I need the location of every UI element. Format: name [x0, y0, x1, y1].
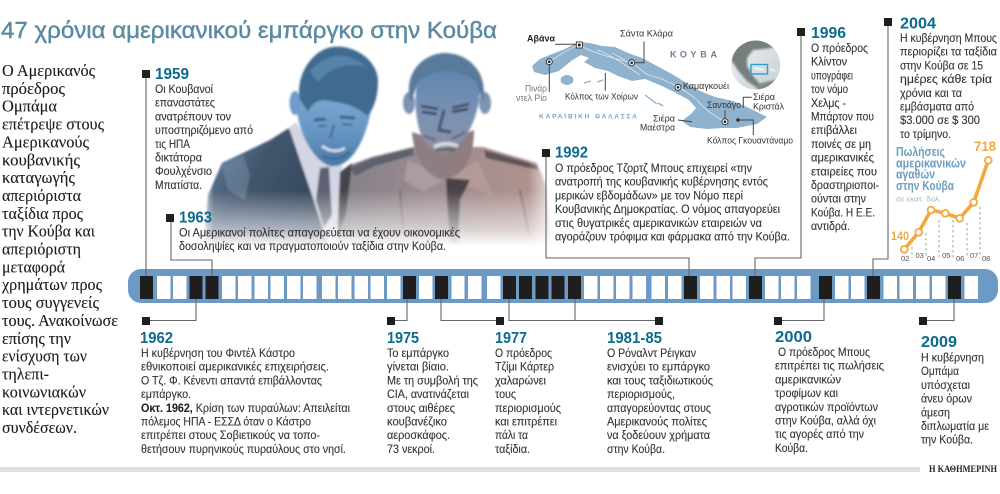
map labels: Κόλπος των Χοίρων: [565, 91, 638, 102]
event: 2004: $3.000 σε $ 300: [900, 113, 980, 127]
globe locator: [731, 40, 780, 90]
timeline bar: [128, 269, 998, 303]
event: 2000: στην Κούβα, αλλά όχι: [775, 414, 876, 428]
event: 1959: Οι Κουβανοί: [155, 82, 213, 96]
intro text: μεταφορά: [2, 257, 65, 276]
photo: Kennedy and Castro: [190, 47, 560, 256]
event: 2009: άνευ όρων: [921, 392, 972, 406]
sales line: [904, 160, 988, 249]
roads: [549, 45, 725, 122]
event: 2004: 2004: [900, 16, 936, 32]
intro text: κοινωνιακών: [2, 382, 87, 401]
Castro hair: [409, 53, 484, 102]
event: 1959: ανατρέπουν τον: [155, 109, 231, 123]
event: 2000: Ο πρόεδρος Μπους: [778, 345, 870, 359]
map labels: Σιέρα: [653, 114, 675, 125]
event: 1977: περιορισμούς: [495, 401, 561, 415]
map labels: Σιέρα: [753, 92, 775, 103]
event: 2009: υπόσχεται: [921, 378, 970, 392]
event: 1977: Ο πρόεδρος: [495, 346, 552, 360]
event: 1975: [387, 317, 478, 456]
event: 1975: 73 νεκροί.: [387, 442, 435, 456]
chart heading: στην Κούβα: [896, 178, 954, 193]
event: 1962: εμπάργκο.: [141, 387, 191, 401]
chart heading: Πωλήσεις: [896, 144, 945, 159]
event: 2000: τις αγορές από την: [775, 427, 864, 441]
event: 1981-85: στην Κούβα.: [607, 442, 665, 456]
chart heading: [896, 144, 966, 204]
event: 1981-85: και τους ταξιδιωτικούς: [607, 373, 713, 387]
event: 2004: ημέρες κάθε τρία: [900, 72, 992, 86]
event: 1992: Ο πρόεδρος Τζορτζ Μπους επιχειρεί «την: [555, 161, 752, 175]
map labels: ΚΟΥΒΑ: [670, 49, 718, 59]
event: 1975: Με τη συμβολή της: [387, 373, 478, 387]
intro text: Ο Αμερικανός: [2, 61, 95, 80]
event: 2009: άμεση: [921, 405, 950, 419]
map labels: Κριστάλ: [753, 102, 784, 112]
data points: [901, 157, 992, 253]
event: 2004: [884, 16, 997, 141]
event: 1963: δοσοληψίες και να πραγματοποιούν ταξίδια στην Κούβα.: [179, 239, 446, 253]
empty year cells: [157, 276, 978, 299]
event: 1959: επαναστάτες: [155, 96, 215, 110]
map labels: Καμαγκουέι: [683, 81, 729, 92]
map labels: ντελ Ρίο: [516, 93, 547, 104]
Castro face: [416, 68, 480, 153]
event: 1963: [166, 210, 460, 253]
event: 2000: Κούβα.: [775, 441, 808, 455]
event: 1996: αμερικανικές: [811, 151, 874, 165]
island: [532, 42, 767, 129]
event: 1996: ποινές σε μη: [811, 137, 871, 151]
event: 1996: Μπάρτον που: [811, 110, 874, 124]
event: 1977: και επιτρέπει: [495, 414, 557, 428]
intro text: επέτρεψε στους: [2, 115, 104, 134]
event: 1981-85: 1981-85: [607, 330, 662, 347]
event: 2009: Η κυβέρνηση: [921, 350, 984, 364]
event: 1996: Ο πρόεδρος: [811, 41, 868, 55]
event: 1981-85: να ξοδεύουν χρήματα: [607, 428, 710, 442]
event: 1977: χαλαρώνει: [495, 373, 546, 387]
event: 2000: επιτρέπει τις πωλήσεις: [775, 359, 884, 373]
title: 47 χρόνια αμερικανικού εμπάργκο στην Κούβα: [1, 17, 497, 43]
event: 2000: 2000: [775, 329, 812, 346]
Castro beard: [412, 130, 474, 179]
intro text: κουβανικής: [2, 150, 80, 169]
map labels: Αβάνα: [527, 34, 555, 44]
event: 1962: 1962: [140, 330, 173, 347]
event: 1996: 1996: [811, 25, 846, 42]
event: 2004: το τρίμηνο.: [900, 127, 951, 141]
event: 2000: [774, 317, 884, 455]
event: 1981-85: Αμερικανούς πολίτες: [607, 414, 707, 428]
value labels: 718: [974, 138, 996, 154]
event: 1975: γίνεται βίαιο.: [387, 360, 449, 374]
intro text: απεριόριστη: [2, 240, 81, 258]
Castro features: [421, 104, 469, 151]
intro text: και ιντερνετικών: [2, 400, 110, 419]
Kennedy jacket: [203, 128, 330, 250]
map labels: Κόλπος Γκουαντάναμο: [707, 135, 793, 146]
event: 1962: Η κυβέρνηση του Φιντέλ Κάστρο: [141, 346, 295, 360]
map labels: ΚΑΡΑΪΒΙΚΗ ΘΑΛΑΣΣΑ: [539, 112, 637, 120]
intro text: ταξίδια προς: [2, 204, 83, 223]
intro text: πρόεδρος: [2, 79, 65, 98]
event: 1996: υπογράφει: [811, 68, 853, 82]
year labels: 06: [956, 254, 964, 263]
value labels: [891, 138, 996, 243]
map labels: [516, 29, 793, 146]
event: 1962: πόλεμος ΗΠΑ - ΕΣΣΔ όταν ο Κάστρο: [141, 414, 311, 428]
map labels: Σάντα Κλάρα: [620, 29, 673, 40]
event: 1977: [495, 317, 561, 456]
leader lines: [549, 42, 753, 135]
event: 1962: [140, 317, 350, 456]
intro text: τους συγγενείς: [2, 293, 99, 312]
event: 1959: Φουλχένσιο: [155, 164, 212, 178]
event: 1977: τους: [495, 387, 516, 401]
year labels: 03: [916, 251, 924, 260]
Isla de la Juventud and cays: [560, 75, 663, 106]
event: 1963: Οι Αμερικανοί πολίτες απαγορεύεται να έχουν οικονομικές: [179, 226, 460, 240]
event: 1992: αγοράζουν τρόφιμα και φάρμακα από την Κούβα.: [555, 230, 790, 244]
event: 1977: 1977: [495, 330, 527, 347]
connector lines: [146, 25, 954, 320]
event: 1959: Μπατίστα.: [155, 178, 202, 192]
year labels: 07: [970, 251, 978, 260]
intro text: τηλεπι-: [2, 364, 49, 384]
map labels: Σαντιάγο: [707, 100, 741, 111]
bottom rule: [0, 467, 920, 472]
event: 1992: Κουβανικής Δημοκρατίας. Ο νόμος απαγορεύει: [555, 202, 780, 216]
event: 2009: Ομπάμα: [921, 364, 959, 378]
event: 1959: τις ΗΠΑ: [155, 137, 190, 151]
Castro uniform: [336, 147, 552, 250]
event: 2009: 2009: [921, 334, 957, 351]
map labels: Πινάρ: [525, 84, 547, 95]
event: 2009: την Κούβα.: [921, 433, 973, 447]
event: 1959: δικτάτορα: [155, 150, 202, 164]
event: 2004: χρόνια και τα: [900, 86, 962, 100]
year labels: 05: [942, 251, 950, 260]
event: 1975: κουβανέζικο: [387, 414, 447, 428]
event: 1959: υποστηριζόμενο από: [155, 123, 253, 137]
event: 1996: Κούβα. Η Ε.Ε.: [811, 205, 875, 219]
event: 1992: 1992: [555, 144, 588, 162]
event: 2000: τροφίμων και: [775, 386, 838, 400]
event: 1959: 1959: [155, 66, 189, 83]
event: 1977: ταξίδια.: [495, 442, 530, 456]
intro text: τους. Ανακοίνωσε: [2, 311, 118, 330]
intro text: καταγωγής: [2, 168, 75, 187]
event: 1996: αντιδρά.: [811, 219, 850, 233]
event: 1996: εταιρείες που: [811, 164, 877, 178]
Kennedy features: [314, 117, 355, 159]
event: 1977: Τζίμι Κάρτερ: [495, 360, 554, 374]
event: 1992: μερικών εβδομάδων» με τον Νόμο περί: [555, 188, 743, 202]
event: 1996: τον νόμο: [811, 82, 848, 96]
intro text: Αμερικανούς: [2, 132, 89, 151]
event: 1981-85: απαγορεύοντας στους: [607, 401, 711, 415]
Castro collar: [400, 160, 530, 245]
intro text: Ομπάμα: [2, 97, 57, 116]
event: 1996: Χελμς -: [811, 96, 846, 110]
event: 1962: επιτρέπει στους Σοβιετικούς να τοπο-: [141, 428, 320, 442]
Kennedy face: [296, 82, 372, 166]
event: 1992: στις θυγατρικές αμερικανικών εταιρειών να: [555, 216, 762, 230]
event: 1996: επιβάλλει: [811, 123, 857, 137]
event: 2000: αγροτικών προϊόντων: [775, 400, 878, 414]
event: 1981-85: [607, 317, 713, 456]
city markers: [546, 42, 740, 125]
event: 1981-85: περιορισμούς,: [607, 387, 675, 401]
event: 1975: αεροσκάφος.: [387, 428, 450, 442]
intro text: επίσης την: [2, 329, 72, 348]
map labels: Μαέστρα: [640, 123, 675, 134]
chart heading: σε εκατ. δολ.: [896, 195, 941, 204]
event: 1975: 1975: [387, 330, 419, 347]
event: 1996: δραστηριοποι-: [811, 178, 879, 192]
intro text: απεριόριστα: [2, 186, 81, 205]
event: 1996: ούνται στην: [811, 192, 866, 206]
event: 1996: Κλίντον: [811, 55, 847, 69]
Kennedy hair: [299, 47, 378, 116]
event: 1975: στους αιθέρες: [387, 401, 455, 415]
year labels: 02: [901, 254, 909, 263]
event: 1977: πάλι τα: [495, 428, 528, 442]
event: 1963: 1963: [179, 210, 212, 226]
event: 1981-85: ενισχύει το εμπάργκο: [607, 360, 710, 374]
intro text: χρημάτων προς: [1, 275, 102, 294]
event: 1992: [542, 144, 790, 244]
value labels: 140: [891, 229, 909, 243]
intro text: ενίσχυση των: [2, 347, 87, 366]
intro text: την Κούβα και: [2, 222, 96, 241]
Kennedy shirt and tie: [289, 122, 346, 250]
map of Cuba: [516, 29, 793, 146]
event: 1996: [797, 25, 879, 233]
event: 2004: στην Κούβα σε 15: [900, 58, 983, 72]
event: 1962: Ο Τζ. Φ. Κένεντι απαντά επιβάλλοντας: [141, 373, 322, 387]
event: 1981-85: Ο Ρόναλντ Ρέιγκαν: [607, 346, 696, 360]
event: 1962: εθνικοποιεί αμερικανικές επιχειρήσεις.: [141, 360, 329, 374]
intro text: συνδέσεων.: [2, 418, 77, 437]
event: 2009: [919, 317, 990, 447]
event: 1962: θετήσουν πυρηνικούς πυραύλους στο νησί.: [141, 442, 346, 456]
intro text: [1, 61, 118, 437]
event: 2009: διπλωματία με: [921, 419, 990, 433]
event: 1975: Το εμπάργκο: [387, 346, 449, 360]
year labels: 08: [982, 254, 990, 263]
year labels: 04: [927, 254, 935, 263]
chart heading: αγαθών: [896, 167, 935, 182]
event: 1959: [142, 66, 253, 192]
chart heading: αμερικανικών: [896, 155, 966, 170]
event: 1962: Οκτ. 1962, Κρίση των πυραύλων: Απειλείται: [141, 401, 350, 415]
event: 2000: αμερικανικών: [775, 372, 841, 386]
marked year cells: [140, 276, 961, 299]
event: 1992: ανατροπή της κουβανικής κυβέρνησης εντός: [555, 175, 768, 189]
year labels: [901, 251, 990, 263]
event: 2004: εμβάσματα από: [900, 100, 974, 114]
event: 1975: CIA, ανατινάζεται: [387, 387, 469, 401]
line chart: US goods sales to Cuba: [891, 138, 996, 263]
